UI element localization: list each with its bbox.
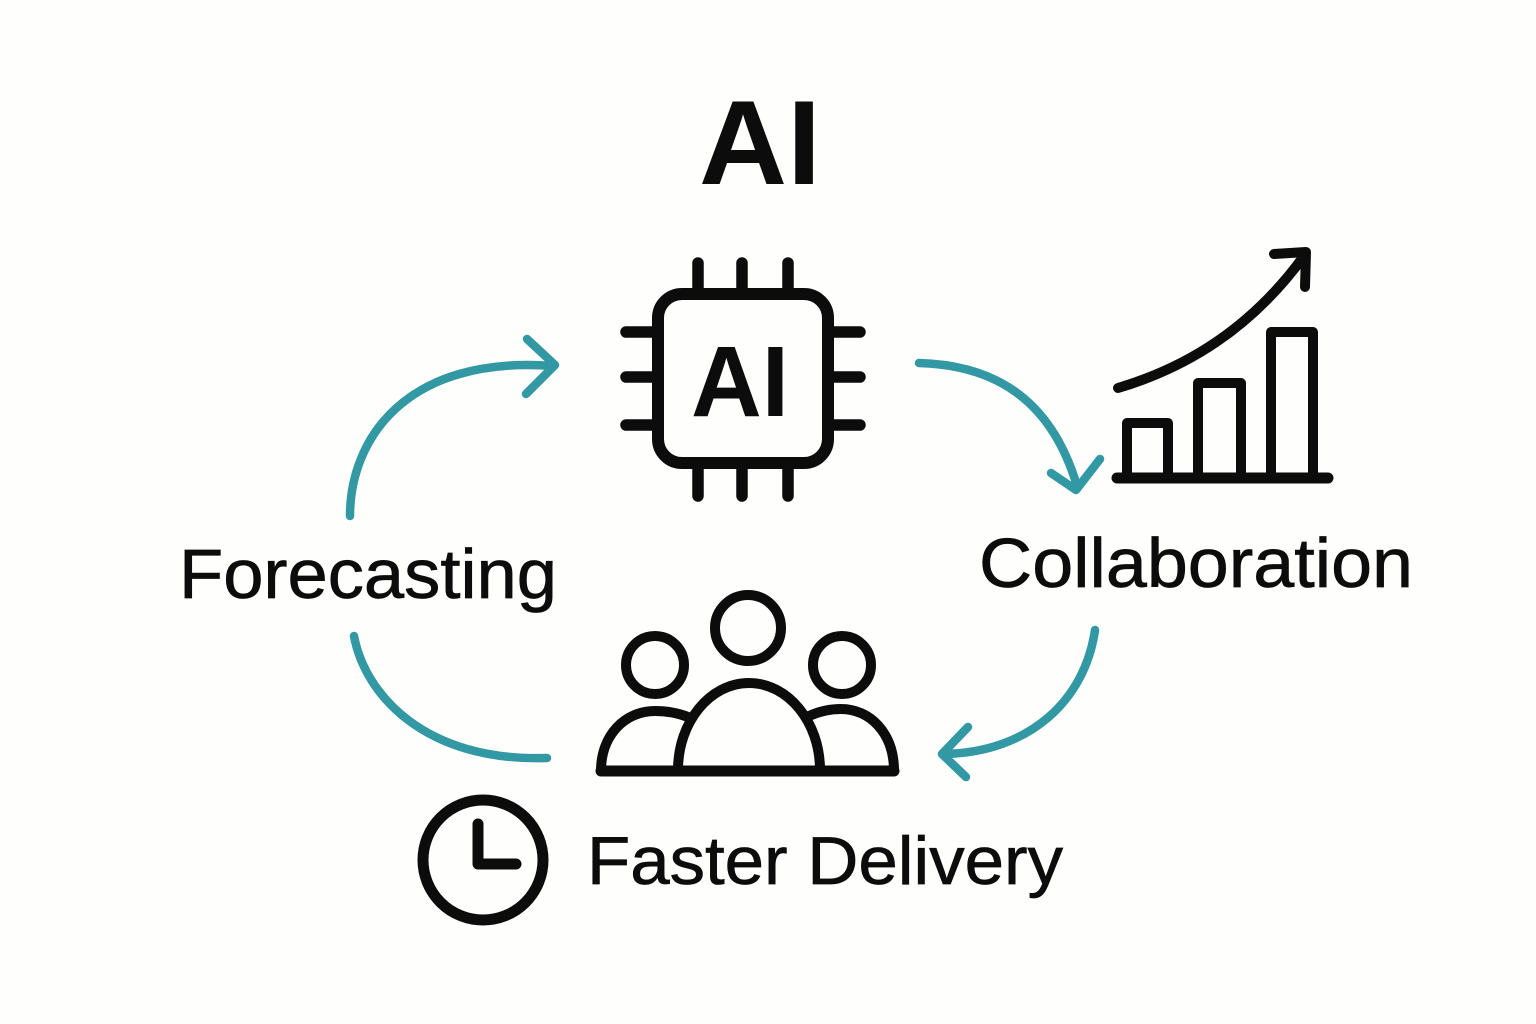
label: faster delivery: Faster Delivery xyxy=(587,823,1063,899)
icon: team of people xyxy=(601,595,894,771)
title: AI xyxy=(699,76,821,210)
arrow: forecasting to chip xyxy=(350,339,555,516)
icon: AI chip xyxy=(626,263,860,496)
chip label: AI xyxy=(691,326,789,438)
arrow: chip to collaboration xyxy=(919,363,1100,490)
arrow: collaboration to delivery xyxy=(942,630,1095,777)
icon: growth bar chart xyxy=(1117,252,1328,478)
label: collaboration: Collaboration xyxy=(979,524,1413,602)
icon: clock xyxy=(423,800,543,920)
arrow: delivery to forecasting xyxy=(354,636,547,758)
label: forecasting: Forecasting xyxy=(179,535,557,613)
